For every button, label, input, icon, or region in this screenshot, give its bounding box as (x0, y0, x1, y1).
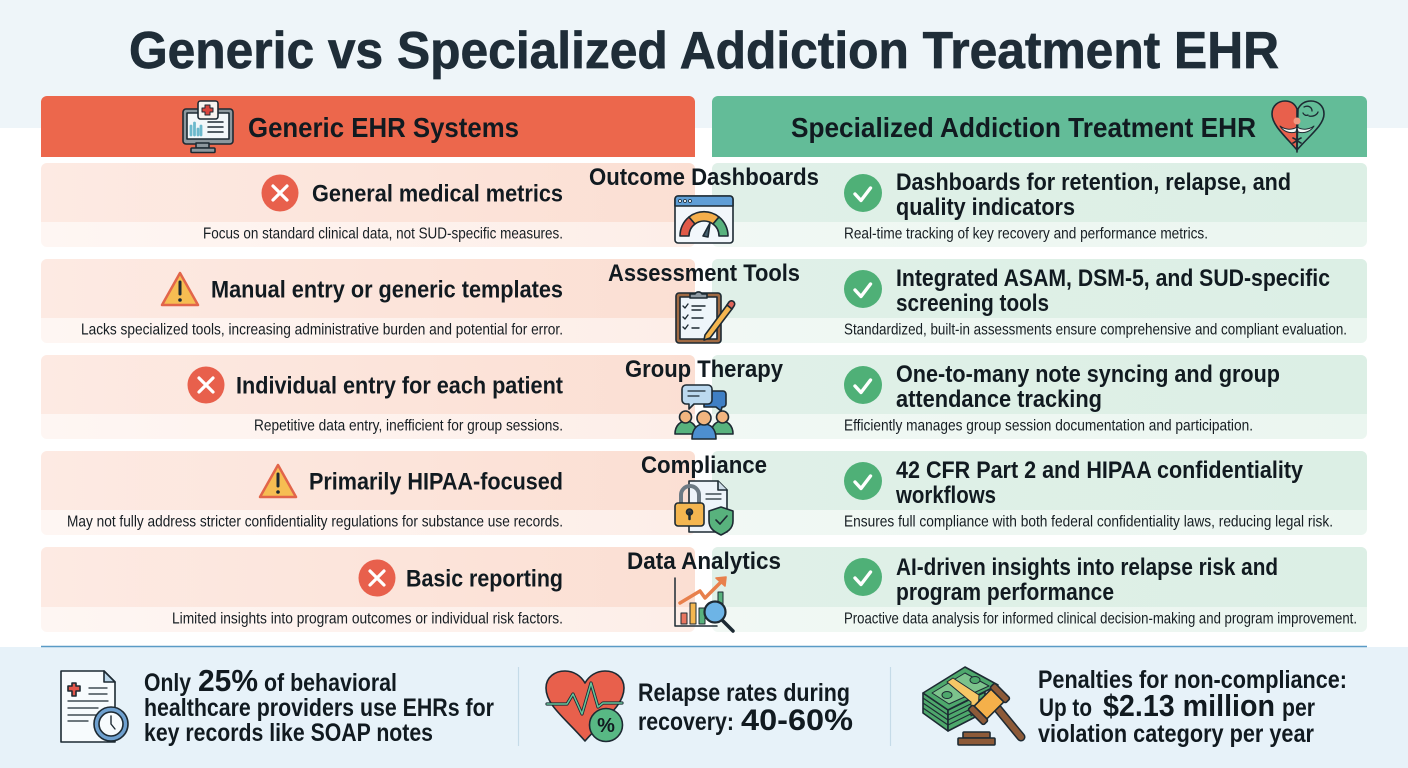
icon: monitor with medical record (183, 101, 233, 152)
heading (896, 361, 1280, 413)
title: Generic vs Specialized Addiction Treatment EHR (129, 22, 1279, 80)
panel: generic basic reporting (41, 547, 695, 632)
text: $2.13 million (1103, 688, 1275, 723)
icon: lock document and shield (675, 481, 733, 535)
panel: generic manual entry (41, 259, 695, 343)
row: group therapy (41, 355, 1367, 439)
heading: workflows (895, 482, 996, 509)
heading: Integrated ASAM, DSM-5, and SUD-specific (896, 265, 1330, 292)
heading: program performance (896, 579, 1114, 606)
heading: Specialized Addiction Treatment EHR (791, 112, 1256, 143)
text: 25% (198, 663, 258, 698)
heading: One-to-many note syncing and group (896, 361, 1280, 388)
heading: screening tools (896, 290, 1049, 317)
panel header: generic EHR systems (41, 96, 695, 157)
text: key records like SOAP notes (144, 719, 433, 747)
icon: heart with pulse and percent (546, 671, 624, 742)
heading: Individual entry for each patient (236, 372, 563, 400)
icon: heart with pulse and percent: % (597, 715, 615, 737)
text: of behavioral (264, 669, 397, 697)
text: 40-60% (741, 704, 853, 737)
heading: attendance tracking (896, 386, 1102, 413)
description: Limited insights into program outcomes or individual risk factors. (172, 610, 563, 628)
panel header: specialized addiction treatment EHR (712, 96, 1367, 157)
text: per (1282, 694, 1315, 722)
heading: General medical metrics (312, 180, 563, 208)
text (638, 679, 853, 737)
icon: heart and brain with caduceus (1272, 101, 1324, 152)
icon: x mark (188, 366, 224, 404)
panel: specialized dashboards (712, 163, 1367, 247)
panel: specialized confidentiality (712, 451, 1367, 535)
category label: Outcome Dashboards (589, 164, 819, 191)
stat: 25 percent adoption (61, 663, 494, 747)
icon: chart with magnifier (675, 577, 733, 631)
text: violation category per year (1038, 720, 1314, 748)
heading (896, 169, 1291, 221)
icon: warning triangle (260, 465, 296, 497)
category label: Assessment Tools (608, 260, 800, 287)
text: Penalties for non-compliance: (1038, 666, 1347, 694)
icon: x mark (262, 174, 298, 212)
panel: generic individual entry (41, 355, 695, 439)
text (1038, 666, 1347, 748)
panel: generic HIPAA (41, 451, 695, 535)
icon: clipboard and pencil (676, 292, 735, 343)
text: recovery: (638, 708, 734, 736)
icon: gauge dashboard (675, 196, 733, 243)
heading (896, 554, 1278, 606)
description: Ensures full compliance with both federal confidentiality laws, reducing legal risk. (844, 514, 1333, 530)
heading: Generic EHR Systems (248, 112, 519, 143)
heading: Dashboards for retention, relapse, and (896, 169, 1291, 196)
stat: relapse rates (546, 671, 853, 742)
heading: Manual entry or generic templates (211, 276, 563, 304)
text: Relapse rates during (638, 679, 850, 707)
icon: money stack and gavel (923, 667, 1021, 745)
stat: non-compliance penalties (923, 666, 1347, 748)
icon: check mark (844, 270, 882, 308)
icon: check mark (844, 462, 882, 500)
heading (895, 457, 1304, 509)
icon: check mark (844, 558, 882, 596)
text (144, 663, 494, 747)
row: data analytics (41, 547, 1367, 632)
row: assessment tools (41, 259, 1367, 343)
description: Real-time tracking of key recovery and performance metrics. (844, 226, 1208, 242)
icon: x mark (358, 560, 396, 596)
panel: generic metrics (41, 163, 695, 247)
panel: specialized group notes (712, 355, 1367, 439)
text: Up to (1039, 694, 1092, 722)
icon: medical record with clock (61, 671, 128, 742)
icon: warning triangle (162, 273, 198, 305)
panel: specialized assessment tools (712, 259, 1367, 343)
row: outcome dashboards (41, 163, 1367, 247)
heading: Basic reporting (406, 566, 563, 592)
description: May not fully address stricter confidentiality regulations for substance use records. (67, 514, 563, 530)
category label: Group Therapy (625, 356, 784, 383)
heading (896, 265, 1330, 317)
icon: group with speech bubbles (675, 385, 733, 439)
panel: specialized AI insights (712, 547, 1367, 632)
heading: Primarily HIPAA-focused (309, 468, 563, 496)
heading: 42 CFR Part 2 and HIPAA confidentiality (896, 457, 1304, 484)
row: compliance (41, 451, 1367, 535)
category label: Compliance (641, 452, 767, 479)
stats band (0, 646, 1408, 768)
category label: Data Analytics (627, 548, 781, 575)
description: Focus on standard clinical data, not SUD-specific measures. (203, 226, 563, 242)
text: healthcare providers use EHRs for (144, 694, 494, 722)
heading: AI-driven insights into relapse risk and (896, 554, 1278, 581)
text: Only (144, 669, 191, 697)
icon: check mark (844, 366, 882, 404)
icon: check mark (844, 174, 882, 212)
description: Repetitive data entry, inefficient for group sessions. (254, 418, 563, 434)
description: Efficiently manages group session documentation and participation. (844, 418, 1253, 434)
heading: quality indicators (896, 194, 1075, 221)
description: Lacks specialized tools, increasing administrative burden and potential for error. (81, 322, 563, 338)
